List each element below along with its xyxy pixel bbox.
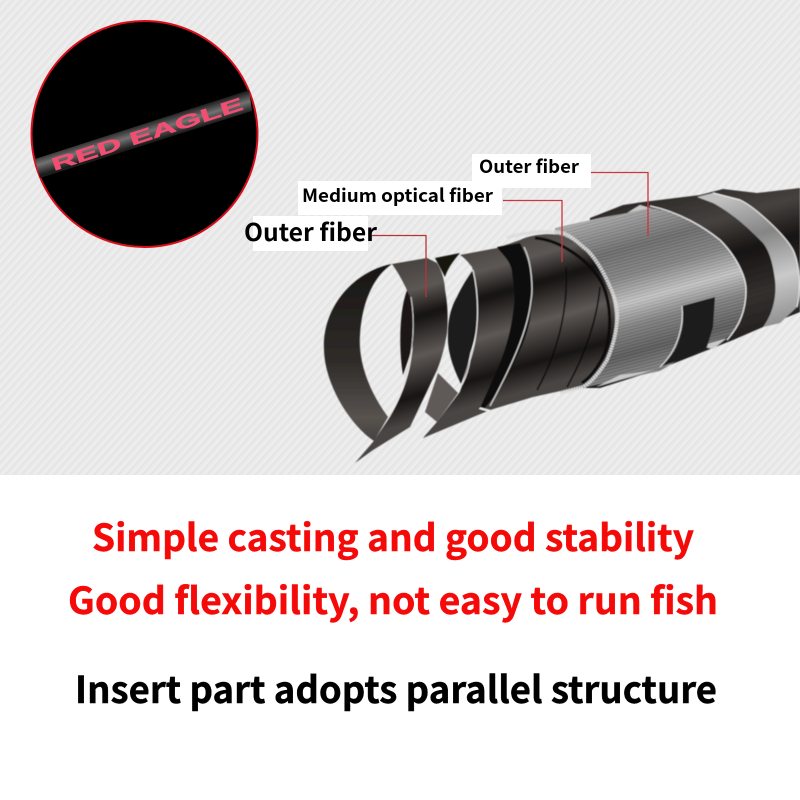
brand text on rod: RED EAGLE bbox=[49, 94, 245, 175]
label: outer fiber top bbox=[472, 153, 591, 188]
inset: rod close-up circle bbox=[32, 21, 258, 247]
leader line: medium optical fiber bbox=[503, 200, 562, 262]
loop back top bbox=[435, 253, 460, 277]
rod back body bbox=[583, 188, 800, 388]
coil body front bbox=[423, 234, 615, 438]
white tick bbox=[479, 408, 490, 411]
coil seam lines bbox=[537, 267, 600, 390]
panel: textured gray background bbox=[0, 0, 800, 475]
dotted white ring bbox=[507, 232, 617, 393]
inner crescent of second loop bbox=[448, 270, 478, 384]
black gap band bbox=[472, 243, 532, 410]
second ribbon bbox=[423, 248, 514, 438]
label: outer fiber top: Outer fiber bbox=[479, 153, 579, 179]
label: medium optical fiber: Medium optical fiber bbox=[302, 182, 493, 208]
leader line: outer fiber top bbox=[591, 172, 648, 236]
heading: simple casting: Simple casting and good stability bbox=[92, 508, 694, 562]
light tabs bbox=[596, 205, 727, 387]
rod section in circle bbox=[35, 90, 252, 178]
left ribbon bbox=[324, 264, 392, 441]
leader line: outer fiber left bbox=[372, 236, 426, 297]
white strip line bbox=[490, 247, 532, 406]
heading: good flexibility: Good flexibility, not easy to run fish bbox=[68, 571, 718, 625]
inner gray fiber cylinder bbox=[555, 208, 746, 392]
inner crescent bbox=[400, 288, 415, 375]
front ribbon with tip bbox=[355, 258, 448, 463]
cut-out wrap piece bbox=[660, 297, 715, 367]
dark shadow inside ring bbox=[535, 238, 610, 383]
silver wrap band bbox=[697, 193, 799, 327]
gray lower ribbon piece bbox=[425, 373, 458, 422]
curved wrap edge line bbox=[650, 206, 746, 340]
label: medium optical fiber bbox=[298, 181, 502, 215]
text: insert part: Insert part adopts parallel structure bbox=[75, 660, 717, 714]
illustration: unwrapped carbon fiber rod bbox=[324, 188, 800, 463]
label: outer fiber left: Outer fiber bbox=[244, 213, 378, 248]
